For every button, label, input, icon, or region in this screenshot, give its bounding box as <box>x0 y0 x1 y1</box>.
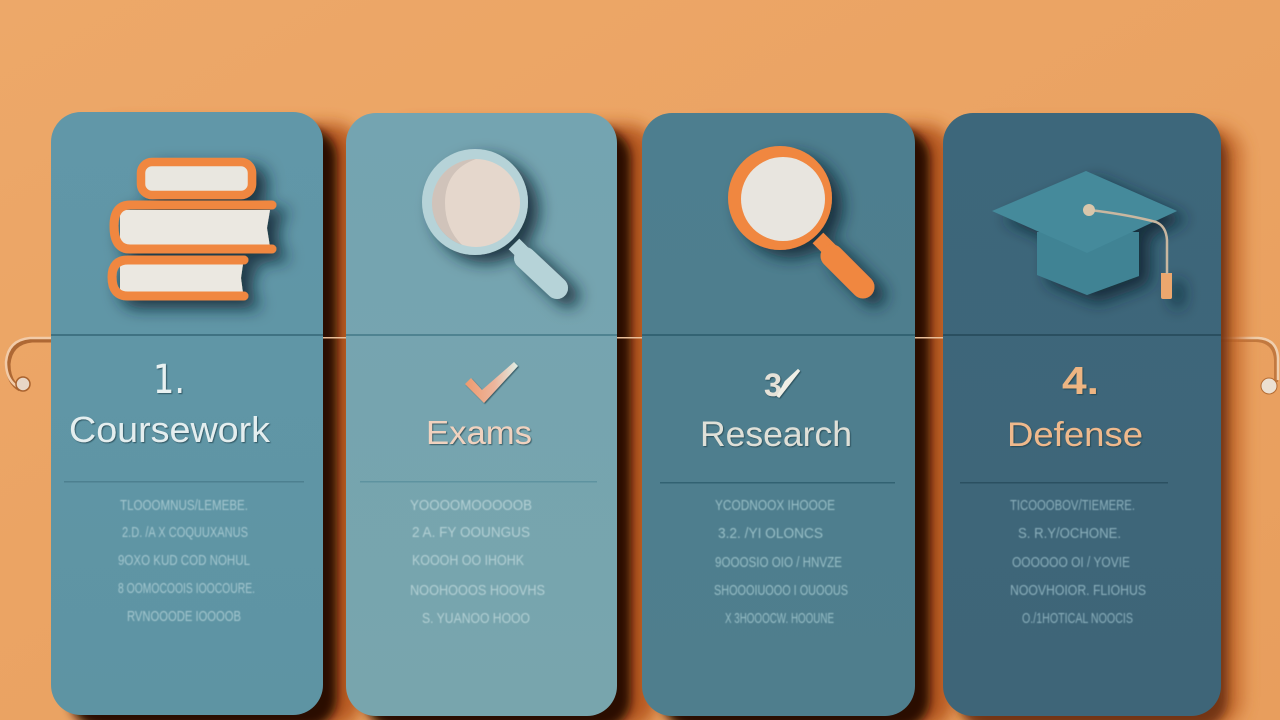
panel: defense <box>943 113 1243 720</box>
heading: coursework: Coursework <box>69 409 271 450</box>
text block: NOOHOOOS HOOVHS <box>410 582 545 599</box>
text block: 2 A. FY OOUNGUS <box>412 524 530 541</box>
text block: S. R.Y/OCHONE. <box>1018 525 1121 542</box>
heading: defense: Defense <box>1007 416 1143 454</box>
connector seam across gaps <box>323 337 943 338</box>
text block <box>714 497 848 627</box>
panel: coursework <box>51 112 362 720</box>
icon: graduation cap <box>992 171 1177 299</box>
text block: YCODNOOX IHOOOE <box>715 497 835 514</box>
icon: orange magnifying glass <box>728 146 863 287</box>
text block: TICOOOBOV/TIEMERE. <box>1010 497 1135 514</box>
text block: KOOOH OO IHOHK <box>412 552 524 569</box>
icon: numeral with check <box>764 367 799 403</box>
text block: 2.D. /A X COQUUXANUS <box>122 524 248 541</box>
text block: X 3HOOOCW. HOOUNE <box>725 610 834 627</box>
icon: stack of books <box>112 162 272 296</box>
icon: light magnifying glass <box>422 149 557 288</box>
text block: S. YUANOO HOOO <box>422 610 530 627</box>
heading: research: Research <box>700 415 852 454</box>
text block <box>118 497 255 625</box>
panel: research <box>642 113 954 720</box>
text block: RVNOOODE IOOOOB <box>127 608 241 625</box>
text block: TLOOOMNUS/LEMEBE. <box>120 497 248 514</box>
number: 4. <box>1062 360 1099 403</box>
text block: NOOVHOIOR. FLIOHUS <box>1010 582 1146 599</box>
text block: OOOOOO OI / YOVIE <box>1012 554 1130 571</box>
text block <box>410 497 545 627</box>
text block: YOOOOMOOOOOB <box>410 497 532 514</box>
text block: 3.2. /YI OLONCS <box>718 525 823 542</box>
text block: O./1HOTICAL NOOCIS <box>1022 610 1133 627</box>
text block <box>1010 497 1146 627</box>
text block: SHOOOIUOOO I OUOOUS <box>714 582 848 599</box>
icon: numeral with check: 3 <box>764 367 782 403</box>
text block: 9OOOSIO OIO / HNVZE <box>715 554 842 571</box>
number: 1. <box>153 357 185 403</box>
heading: exams: Exams <box>426 414 532 451</box>
connector hook: left <box>6 338 54 391</box>
icon: check mark <box>465 362 518 403</box>
connector hook: right <box>1218 338 1278 394</box>
text block: 8 OOMOCOOIS IOOCOURE. <box>118 580 255 597</box>
panel: exams <box>346 113 657 720</box>
text block: 9OXO KUD COD NOHUL <box>118 552 250 569</box>
